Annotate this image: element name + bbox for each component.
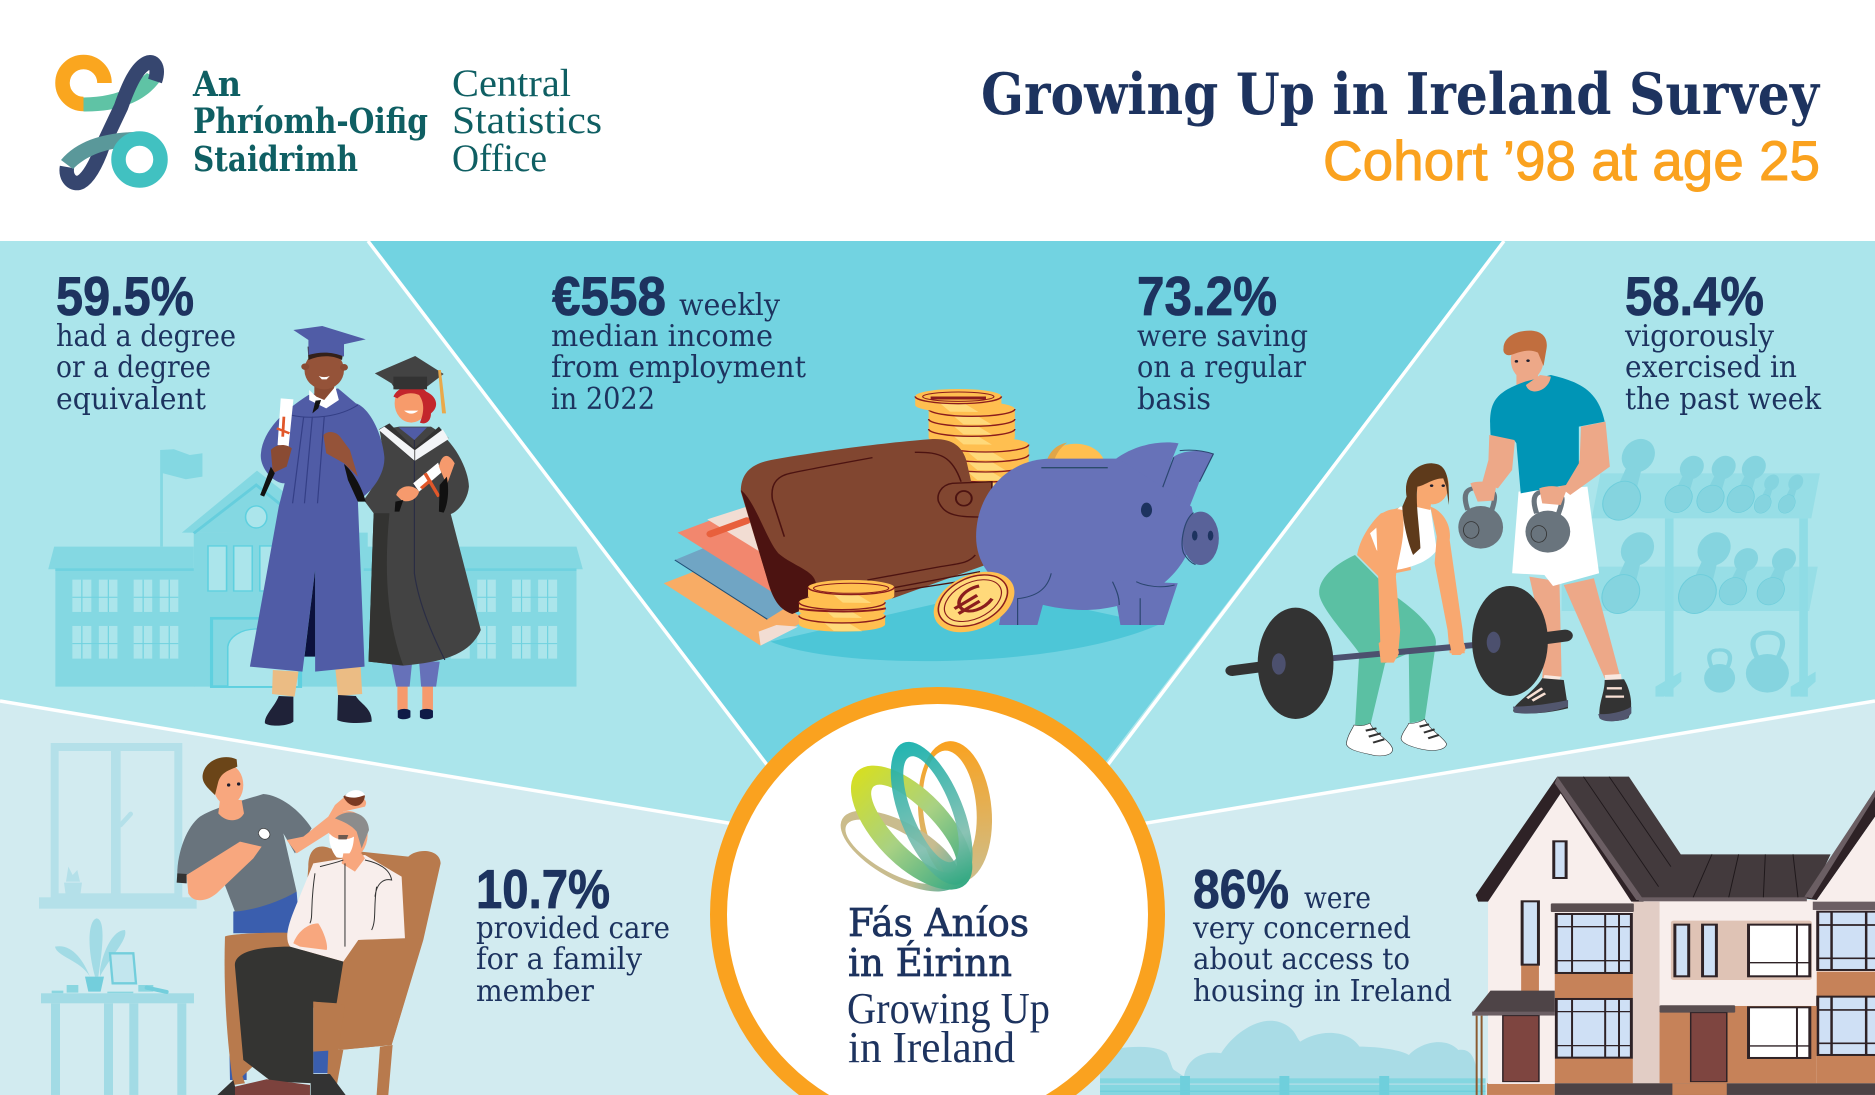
stat: care: for a family (476, 942, 642, 977)
floor shadow (770, 590, 1158, 661)
illustration: gym scene (1232, 331, 1820, 756)
subtitle: Cohort ’98 at age 25 (1323, 129, 1820, 192)
illustration: houses (1472, 777, 1875, 1095)
logo text: English name: Central (452, 62, 571, 105)
older man trousers (235, 947, 343, 1083)
illustration: carer and older man (39, 747, 441, 1095)
house base (1555, 1083, 1875, 1095)
barbell back (1544, 636, 1565, 638)
illustration: wallet, coins and piggy bank (664, 389, 1219, 661)
stat: degree: had a degree (56, 319, 236, 354)
logo text: English name (452, 62, 602, 180)
wallet (741, 439, 992, 614)
panel divider lines (0, 241, 1875, 825)
euro coin (920, 559, 1028, 645)
piggy bank (976, 442, 1219, 625)
emblem text: Irish name (848, 901, 1029, 985)
logo text: English name: Statistics (452, 99, 602, 142)
stat: saving: on a regular (1137, 350, 1307, 385)
wood panels (1487, 965, 1817, 1095)
stat: income: from employment (551, 350, 806, 385)
illustration: bushes and fence (1100, 1021, 1486, 1095)
dumbbell rack (1562, 435, 1820, 697)
emblem: centre circle (718, 696, 1156, 1095)
stat: housing: about access to (1193, 942, 1410, 977)
emblem text: Irish name: Fás Aníos (848, 901, 1029, 945)
logo: CSO symbol (61, 62, 160, 183)
panel: centre finance background (368, 241, 1504, 900)
right house (1813, 817, 1875, 1095)
barbell (1232, 586, 1548, 719)
chair arm left (225, 933, 293, 1085)
older man (287, 811, 405, 962)
trousers of carer (228, 892, 330, 1080)
chair seat front (313, 1002, 345, 1052)
stat: housing: very concerned (1192, 911, 1411, 946)
chair arm right (337, 938, 423, 1050)
logo text: Irish name (192, 64, 428, 180)
windows (1522, 841, 1810, 1058)
emblem text: English name: Growing Up (847, 984, 1050, 1033)
chair legs and shoes (217, 1045, 393, 1095)
emblem text: English name (847, 984, 1050, 1072)
stat: degree: equivalent (56, 382, 206, 417)
illustration: graduates (250, 326, 481, 726)
stat: income: in 2022 (551, 382, 655, 417)
stat: income (551, 265, 806, 417)
bank notes (664, 507, 806, 646)
carer (177, 757, 366, 912)
porch (1472, 991, 1555, 1095)
stat: housing: housing in Ireland (1193, 974, 1452, 1009)
window and sill (39, 747, 197, 909)
stat: exercise: exercised in (1625, 350, 1797, 385)
stat: exercise: vigorously (1624, 319, 1774, 354)
emblem text: Irish name: in Éirinn (848, 941, 1012, 985)
stat: degree (56, 265, 236, 417)
left house wall (1488, 793, 1636, 1095)
stat: exercise: the past week (1625, 382, 1822, 417)
stat: housing: were (1304, 881, 1371, 916)
stat: saving: basis (1137, 382, 1211, 417)
logo text: Irish name: Staidrimh (193, 139, 358, 180)
logo text: Irish name: An (192, 64, 241, 105)
small coin stack (799, 580, 894, 632)
stat: exercise (1624, 265, 1822, 417)
stat: income: €558 (552, 265, 666, 327)
emblem: Growing Up in Ireland butterfly logo (829, 731, 998, 910)
emblem text: English name: in Ireland (848, 1023, 1015, 1072)
logo text: Irish name: Phríomh-Oifig (193, 101, 428, 142)
stat: income: weekly (679, 288, 780, 323)
female lifter (1319, 463, 1465, 756)
logo text: English name: Office (452, 137, 547, 180)
illustration: school building (48, 449, 583, 687)
stat: care: member (476, 974, 595, 1009)
stat: care (476, 858, 670, 1009)
mid section (1636, 900, 1819, 1087)
panel: bottom right background (935, 701, 1875, 1095)
man graduate (250, 326, 384, 726)
header band (0, 0, 1875, 241)
kettlebells (1458, 482, 1570, 553)
doors (1503, 1013, 1727, 1082)
male trainer (1482, 331, 1631, 721)
stat: housing: 86% (1193, 858, 1289, 920)
stat: housing (1192, 858, 1452, 1009)
stat: saving: were saving (1137, 319, 1308, 354)
panel: top left and right background (0, 241, 1875, 1095)
coin stack back (915, 389, 1029, 491)
roofs (1476, 777, 1875, 902)
panel: bottom left background (0, 701, 940, 1095)
stat: exercise: 58.4% (1625, 265, 1764, 327)
stat: care: 10.7% (476, 858, 610, 920)
stat: degree: or a degree (56, 350, 211, 385)
front step (1672, 1083, 1727, 1095)
stat: saving: 73.2% (1137, 265, 1277, 327)
table with plant and mirror (41, 918, 194, 1095)
chair back (300, 847, 441, 1050)
woman graduate (364, 356, 481, 719)
stat: care: provided care (476, 911, 670, 946)
stat: degree: 59.5% (56, 265, 194, 327)
stat: income: median income (551, 319, 773, 354)
stat: saving (1137, 265, 1308, 417)
lintels (1551, 903, 1735, 1013)
